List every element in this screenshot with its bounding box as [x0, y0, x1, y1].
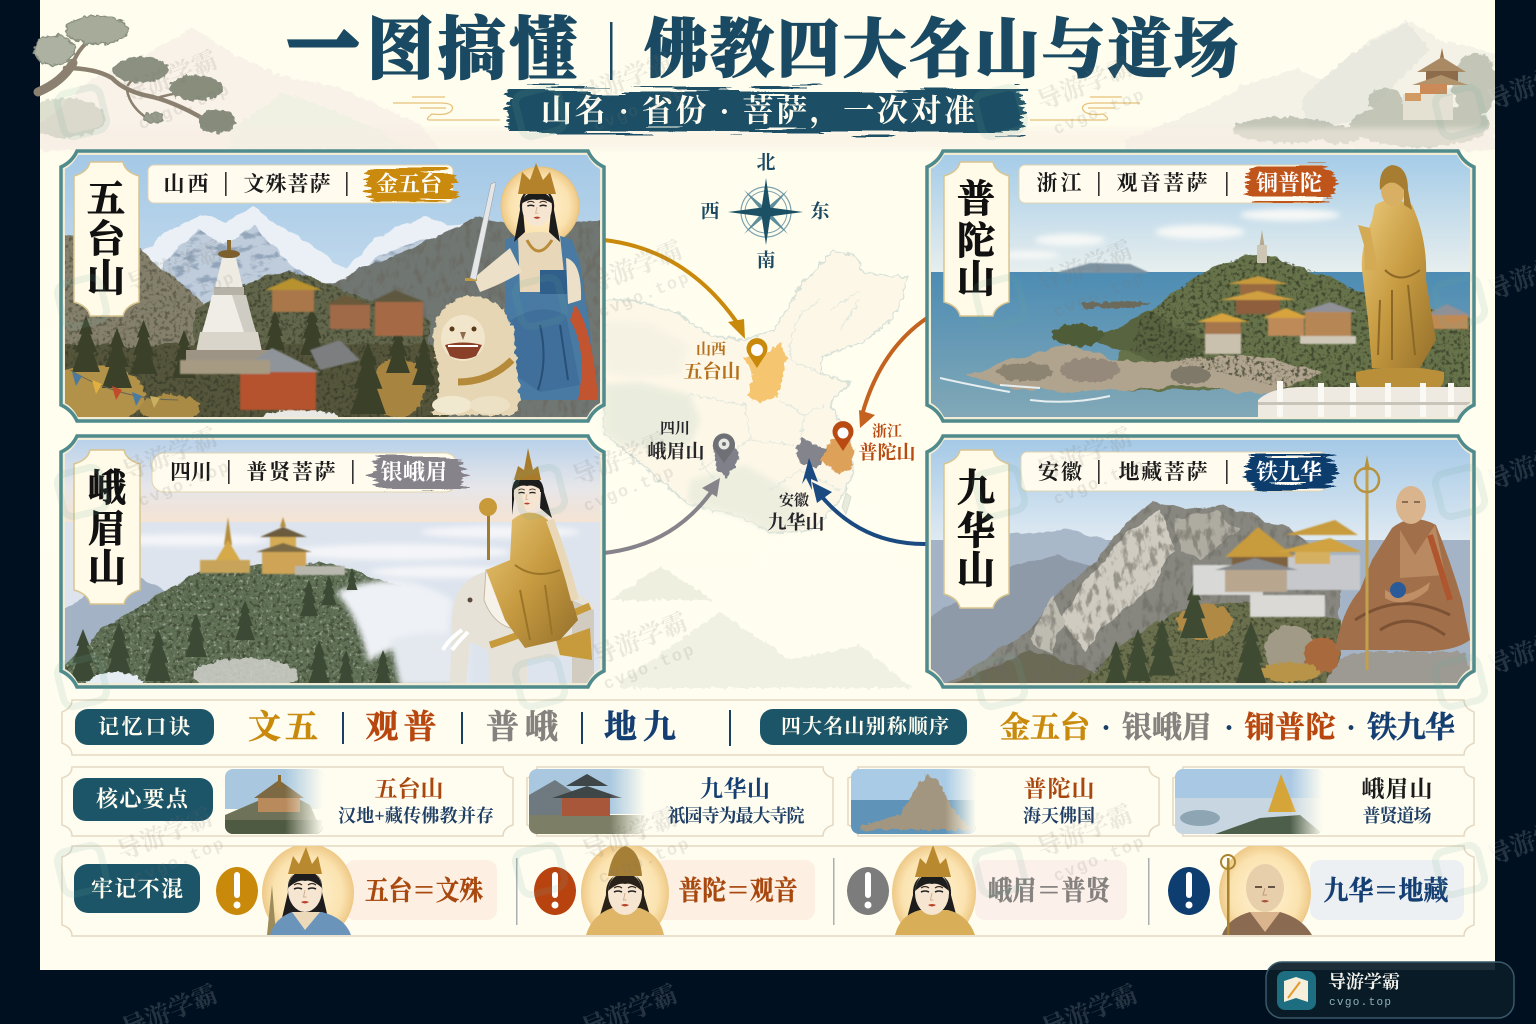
tag bar: Jiuhua: 安徽 — [1038, 460, 1082, 484]
row: memory mnemonic — [62, 700, 1474, 755]
pill: 记忆口诀: 记忆口诀 — [98, 715, 190, 739]
map of China — [604, 250, 907, 533]
watermark overlay: cvgo.top — [1051, 86, 1149, 140]
Taiwan island — [842, 493, 851, 514]
watermark overlay: 导游学霸 — [578, 803, 681, 866]
elephant — [443, 569, 594, 684]
panel: Emei — [61, 436, 604, 696]
plaque: 普陀山: 山 — [957, 259, 995, 301]
pill: 记忆口诀 — [75, 709, 214, 745]
compass labels — [700, 152, 830, 272]
sword — [470, 182, 496, 280]
brand icon — [1277, 971, 1316, 1010]
temples — [1197, 276, 1470, 354]
compass rose — [700, 152, 830, 272]
tag bar: Wutai: 文殊菩萨 — [244, 172, 330, 196]
stone railing — [1258, 381, 1473, 420]
mnemonic phrases: 地九 — [604, 709, 676, 746]
watermark overlay: cvgo.top — [591, 83, 689, 137]
plaque: 九华山: 山 — [957, 550, 995, 592]
card: 峨眉山 key point: 普贤道场 — [1362, 806, 1432, 826]
province: Zhejiang — [820, 437, 855, 473]
watermark overlay: 导游学霸 — [588, 608, 691, 671]
watermark overlay: 导游学霸 — [568, 428, 671, 491]
alias names: 铁九华 — [1367, 712, 1455, 744]
tag bar: Putuo — [1019, 165, 1336, 203]
card base: Jiuhua — [927, 436, 1474, 687]
landscape wash: lower mountains behind map — [610, 566, 912, 688]
watermark overlay: 导游学霸 — [1033, 53, 1136, 116]
title: 图搞懂 — [366, 12, 578, 88]
map label: Jiuhua — [767, 491, 825, 534]
pill: 核心要点 — [73, 778, 213, 821]
thumbnail: Putuo — [851, 769, 976, 834]
plaque: 五台山: 五 — [87, 179, 125, 221]
watermark overlay: cvgo.top — [141, 269, 239, 323]
statue: Guanyin — [1358, 165, 1436, 368]
tag bar: Emei: 普贤菩萨 — [246, 460, 336, 484]
alias names: 铜普陀 — [1244, 712, 1336, 744]
card: 五台山 key point: 汉地+藏传佛教并存 — [338, 805, 494, 826]
bodhisattva: Samantabhadra — [479, 448, 578, 648]
tag bar: Jiuhua: 地藏菩萨 — [1118, 460, 1208, 484]
compass labels: 西 — [700, 200, 720, 222]
watermark overlay: cvgo.top — [136, 458, 234, 512]
item: 九华＝地藏 — [1168, 843, 1464, 943]
card: 五台山 key point: 五台山 — [374, 776, 444, 802]
thumbnail: Jiuhua — [529, 769, 645, 834]
compass labels: 北 — [756, 152, 776, 174]
mountain monastery — [1193, 520, 1362, 617]
panel: Putuo — [927, 151, 1474, 421]
pill: alias order — [760, 709, 967, 745]
plaque: 九华山: 九 — [957, 468, 995, 510]
tag bar: Putuo: 浙江 — [1036, 171, 1082, 195]
pine tree decoration — [34, 16, 235, 132]
pill: 核心要点: 核心要点 — [96, 786, 190, 812]
map label: Wutai: 山西 — [696, 341, 726, 358]
watermark overlay: 导游学霸 — [123, 236, 226, 299]
watermark overlay: 导游学霸 — [1033, 800, 1136, 863]
alias names: · — [1101, 712, 1111, 744]
scene: Wutai — [45, 152, 604, 425]
title: 佛教四大名山与道场 — [644, 14, 1238, 86]
lion — [432, 296, 520, 415]
mnemonic phrases: 观普 — [366, 709, 436, 746]
watermark overlay: 导游学霸 — [113, 803, 216, 866]
card: 普陀山 key point: 普陀山 — [1024, 776, 1094, 802]
watermark overlay: cvgo.top — [596, 269, 694, 323]
plaque: 普陀山: 普 — [957, 179, 995, 221]
plaque: 峨眉山 — [74, 450, 140, 604]
watermark overlay: cvgo.top — [596, 835, 694, 889]
watermark overlay: cvgo.top — [136, 81, 234, 135]
title: 一 — [289, 10, 357, 86]
temple group — [180, 278, 425, 410]
bust: Manjushri — [262, 844, 354, 942]
panel: Wutai — [45, 151, 604, 425]
tag bar: Emei: 银峨眉 — [380, 460, 448, 484]
tag bar: Wutai: 山西 — [164, 172, 208, 196]
staff — [1355, 455, 1379, 670]
bust: Guanyin — [581, 843, 669, 943]
rock base — [1325, 652, 1473, 686]
watermark overlay: 导游学霸 — [583, 236, 686, 299]
plaque: 五台山 — [74, 162, 139, 316]
alias names: 银峨眉 — [1122, 712, 1212, 744]
golden cloud ornaments — [393, 97, 1140, 120]
alert icon — [847, 867, 889, 915]
tag bar: Jiuhua: 铁九华 — [1256, 460, 1322, 484]
marker: Anhui navy arrow — [802, 458, 818, 490]
brand badge: 导游学霸 — [1328, 972, 1400, 992]
map label: Putuo: 普陀山 — [858, 442, 916, 464]
card: 峨眉山 key point: 峨眉山 — [1362, 776, 1432, 802]
tag bar: Emei — [152, 453, 464, 492]
scene: Putuo — [928, 152, 1473, 420]
card: 九华山 key point: 祇园寺为最大寺院 — [668, 806, 804, 826]
plaque: 五台山: 台 — [87, 219, 127, 261]
plaque: 九华山 — [944, 450, 1009, 608]
item: 峨眉＝普贤 — [847, 844, 1127, 942]
temple — [200, 517, 345, 575]
plaque: 峨眉山: 眉 — [88, 509, 126, 551]
landscape wash: header mountains — [25, 20, 1497, 150]
lotus pedestal — [1356, 368, 1444, 387]
tag bar: Wutai — [148, 165, 456, 203]
tag bar: Putuo: 铜普陀 — [1256, 170, 1322, 196]
bust: Ksitigarbha — [1219, 843, 1312, 943]
arrow: Putuo to Zhejiang — [859, 318, 927, 428]
map label: Emei: 峨眉山 — [647, 440, 705, 462]
watermark overlay: cvgo.top — [1051, 269, 1149, 323]
plaque: 普陀山: 陀 — [957, 221, 995, 263]
map label: Wutai: 五台山 — [683, 360, 741, 382]
alert icon — [534, 867, 576, 915]
watermark overlay: 导游学霸 — [573, 48, 676, 111]
watermark overlay: cvgo.top — [131, 835, 229, 889]
alias names — [1000, 712, 1455, 744]
card: 九华山 key point: 九华山 — [700, 776, 770, 802]
statue: Ksitigarbha — [1335, 486, 1470, 651]
watermark overlay: cvgo.top — [581, 463, 679, 517]
item: 五台＝文殊 — [216, 844, 497, 942]
pin: Putuo — [833, 421, 853, 451]
title — [289, 10, 1238, 88]
compass labels: 东 — [810, 200, 830, 222]
mnemonic phrases: 文五 — [248, 709, 318, 746]
plaque: 五台山: 山 — [87, 258, 125, 300]
pill: 牢记不混 — [74, 864, 200, 913]
map label: Emei — [647, 420, 705, 462]
alias names: 金五台 — [1000, 712, 1091, 744]
item: 五台＝文殊: 五台＝文殊 — [365, 876, 483, 906]
brand badge: cvgo.top — [1329, 997, 1391, 1009]
alias names: · — [1346, 712, 1356, 744]
card: 普陀山 key point: 海天佛国 — [1023, 806, 1095, 826]
row: key points — [62, 767, 1474, 836]
watermark overlay: 导游学霸 — [1033, 423, 1136, 486]
pin: Wutai — [746, 338, 768, 368]
mnemonic phrases: 普峨 — [486, 709, 560, 746]
halo — [501, 167, 579, 245]
pin: Emei — [713, 433, 735, 463]
card base: Putuo — [927, 151, 1474, 421]
plaque: 峨眉山: 峨 — [88, 468, 128, 510]
bodhisattva: Manjushri — [465, 163, 598, 400]
watermark overlay: cvgo.top — [1051, 456, 1149, 510]
map label: Emei: 四川 — [660, 420, 690, 437]
arrow: Emei to Sichuan — [604, 478, 720, 553]
stupa — [186, 240, 274, 362]
tag bar: Putuo: 观音菩萨 — [1116, 171, 1208, 195]
row: remember section — [62, 843, 1474, 943]
province: Anhui — [795, 438, 827, 468]
alert icon — [1168, 867, 1210, 915]
tag bar: Wutai: 金五台 — [376, 172, 443, 196]
map label: Jiuhua: 九华山 — [767, 512, 825, 534]
thumbnail: Emei — [1175, 769, 1323, 834]
province: Shanxi — [743, 343, 787, 402]
scene: Jiuhua — [928, 437, 1473, 686]
panel: Jiuhua — [927, 436, 1474, 687]
subtitle ribbon: 山名 · 省份 · 菩萨，一次对准 — [541, 94, 975, 130]
alias names: · — [1224, 712, 1234, 744]
mnemonic phrases — [248, 709, 731, 746]
pagoda — [1257, 230, 1267, 263]
item: 普陀＝观音 — [534, 843, 815, 943]
compass labels: 南 — [756, 248, 776, 272]
watermark overlay: 导游学霸 — [118, 423, 221, 486]
arrow: Wutai to Shanxi — [604, 240, 745, 339]
item: 峨眉＝普贤: 峨眉＝普贤 — [988, 876, 1113, 906]
card: 普陀山 key point — [848, 767, 1159, 836]
map label: Jiuhua: 安徽 — [779, 491, 809, 509]
thumbnail: Wutai — [225, 769, 323, 834]
card base: Emei — [61, 436, 604, 687]
tag bar: Emei: 四川 — [170, 460, 212, 484]
arrow: Jiuhua to Anhui — [812, 482, 927, 544]
province: Sichuan — [712, 445, 739, 478]
item: 普陀＝观音: 普陀＝观音 — [678, 876, 798, 906]
bust: Samantabhadra — [892, 844, 976, 942]
watermark overlay: cvgo.top — [601, 641, 699, 695]
map label: Putuo: 浙江 — [872, 423, 902, 440]
pill: 牢记不混: 牢记不混 — [91, 876, 183, 902]
item: 九华＝地藏: 九华＝地藏 — [1324, 876, 1448, 906]
watermark overlay: 导游学霸 — [118, 46, 221, 109]
alert icon — [216, 867, 258, 915]
scene: Emei — [62, 437, 603, 696]
brand badge — [1266, 962, 1514, 1018]
card: 五台山 key point — [62, 767, 513, 836]
map label: Wutai — [683, 341, 741, 382]
map label: Putuo — [858, 423, 916, 464]
watermark overlay: cvgo.top — [1051, 833, 1149, 887]
tag bar: Jiuhua — [1021, 452, 1336, 491]
watermark overlay: 导游学霸 — [1033, 236, 1136, 299]
plaque: 普陀山 — [944, 162, 1009, 316]
prayer flags — [70, 370, 178, 408]
plaque: 九华山: 华 — [957, 511, 995, 553]
plaque: 峨眉山: 山 — [88, 548, 126, 590]
distant pagoda — [1403, 48, 1468, 120]
card: 峨眉山 key point — [1173, 767, 1474, 836]
card: 九华山 key point — [527, 767, 833, 836]
card base: Wutai — [61, 151, 604, 421]
subtitle ribbon — [393, 90, 1140, 132]
pill: alias order: 四大名山别称顺序 — [781, 715, 949, 738]
